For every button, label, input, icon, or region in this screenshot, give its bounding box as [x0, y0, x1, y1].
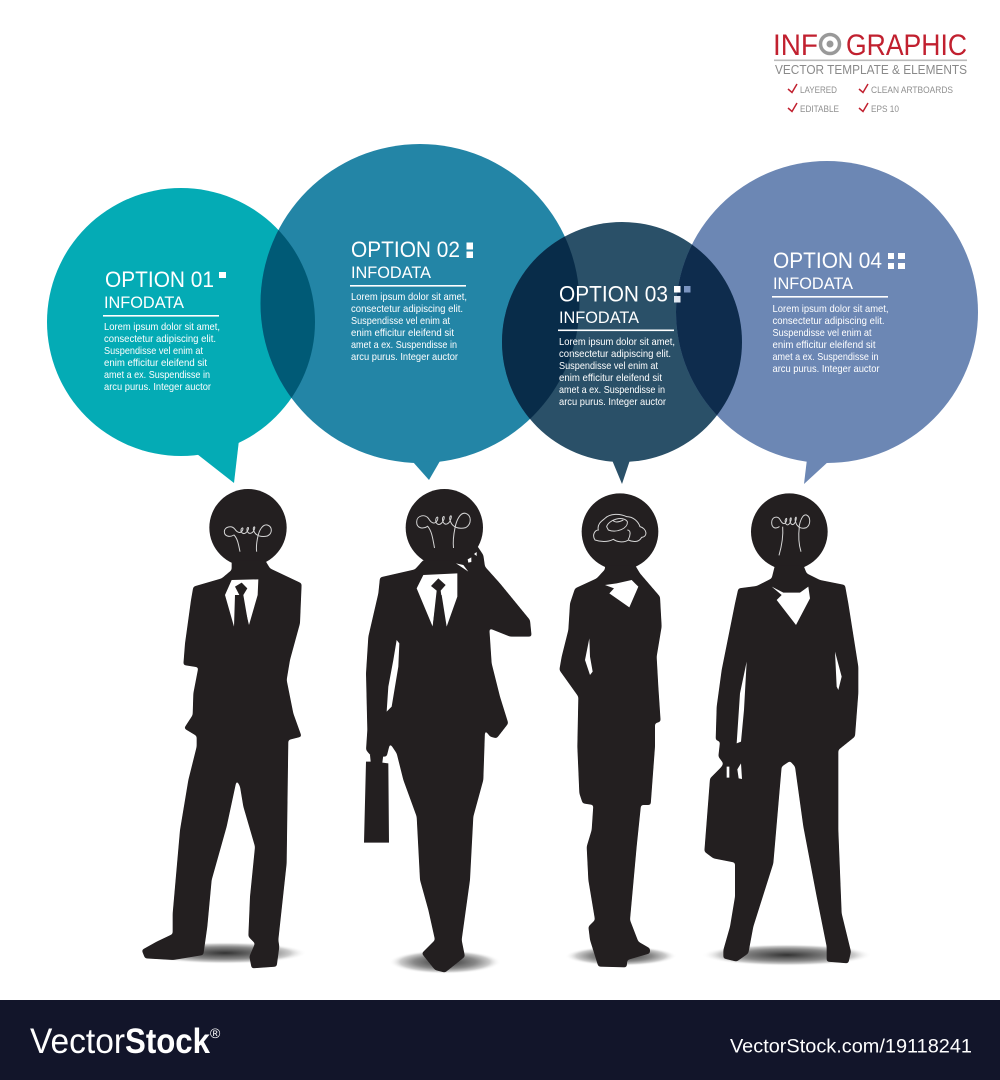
- option 02 text: INFODATA: [351, 263, 432, 282]
- feature checklist: CLEAN ARTBOARDS: [871, 85, 953, 95]
- icon: filament in head 2: [417, 513, 470, 548]
- bubble 1 shape: [47, 188, 315, 483]
- icon: filament in head 4: [772, 515, 810, 555]
- icon: briefcase 2: [364, 755, 389, 843]
- feature checklist: EDITABLE: [800, 104, 839, 114]
- ground shadow: figure 4: [702, 944, 872, 966]
- option 01 text: arcu purus. Integer auctor: [104, 381, 211, 393]
- overlap 1 and 2: [260, 230, 315, 398]
- ground shadow: figure 1: [143, 942, 307, 964]
- bubble 2 shape: [260, 144, 580, 480]
- option 04 text: INFODATA: [773, 274, 854, 293]
- icon: logo target ring: [820, 34, 840, 54]
- option 01 text: [103, 267, 226, 393]
- option 04 text: consectetur adipiscing elit.: [772, 315, 884, 327]
- option 02 text: amet a ex. Suspendisse in: [351, 339, 457, 351]
- option 04 text: amet a ex. Suspendisse in: [772, 351, 879, 363]
- option 04 text: arcu purus. Integer auctor: [772, 363, 880, 375]
- footer image id: VectorStock.com/19118241: [730, 1036, 972, 1058]
- option 01 text: OPTION 01: [105, 267, 214, 292]
- logo wordmark: [773, 29, 967, 62]
- option 03 text: consectetur adipiscing elit.: [559, 348, 671, 360]
- footer band: [0, 1000, 1000, 1080]
- option 04 text: Suspendisse vel enim at: [772, 327, 872, 339]
- option 01 text: INFODATA: [104, 293, 185, 312]
- option 04 text: enim efficitur eleifend sit: [772, 339, 876, 351]
- speech bubbles group: [47, 144, 978, 484]
- footer logo: [30, 1022, 221, 1061]
- option 02 text: Lorem ipsum dolor sit amet,: [351, 291, 467, 303]
- option 03 text: OPTION 03: [559, 282, 668, 306]
- option 03 text: arcu purus. Integer auctor: [559, 396, 666, 408]
- feature checklist: EPS 10: [871, 104, 899, 114]
- footer logo: ®: [210, 1025, 221, 1041]
- option 01 text: Suspendisse vel enim at: [104, 345, 203, 357]
- option 02 text: enim efficitur eleifend sit: [351, 327, 454, 339]
- overlap 3 and 4: [676, 244, 742, 416]
- option 03 text: amet a ex. Suspendisse in: [559, 384, 665, 396]
- ground shadow: figure 3: [565, 946, 677, 966]
- footer logo: Stock: [125, 1022, 210, 1061]
- option 02 text: Suspendisse vel enim at: [351, 315, 450, 327]
- figure 4: businesswoman in trouser suit with bag: [704, 493, 858, 963]
- icon: filament in head 1: [224, 525, 271, 552]
- option 01 text: consectetur adipiscing elit.: [104, 333, 216, 345]
- option 03 text: enim efficitur eleifend sit: [559, 372, 662, 384]
- bubble 3 shape: [502, 222, 742, 484]
- option 03 text: INFODATA: [559, 308, 640, 327]
- option 01 text: Lorem ipsum dolor sit amet,: [104, 321, 220, 333]
- overlap 2 and 3: [502, 236, 580, 419]
- option 04 text: [772, 248, 905, 375]
- option 04 text: OPTION 04: [773, 248, 882, 273]
- figure 1: businessman with arms folded: [142, 489, 302, 968]
- option 01 text: amet a ex. Suspendisse in: [104, 369, 210, 381]
- option 03 text: [558, 282, 690, 408]
- logo wordmark: INF: [773, 29, 818, 62]
- option 02 text: OPTION 02: [351, 237, 460, 262]
- option 04 text: Lorem ipsum dolor sit amet,: [772, 303, 888, 315]
- option 01 text: enim efficitur eleifend sit: [104, 357, 207, 369]
- feature checklist: [788, 84, 953, 114]
- option 03 text: Lorem ipsum dolor sit amet,: [559, 336, 675, 348]
- ground shadow: figure 2: [389, 950, 501, 974]
- feature checklist: LAYERED: [800, 85, 837, 95]
- figure 2: businessman on phone with briefcase: [364, 489, 532, 973]
- bubble 4 shape: [676, 161, 978, 484]
- option 03 text: Suspendisse vel enim at: [559, 360, 658, 372]
- footer logo: Vector: [30, 1022, 125, 1061]
- logo wordmark: GRAPHIC: [846, 29, 967, 62]
- figure 3: businesswoman: [559, 493, 662, 967]
- logo subtitle: VECTOR TEMPLATE & ELEMENTS: [775, 62, 967, 77]
- option 02 text: [350, 237, 473, 363]
- option 02 text: arcu purus. Integer auctor: [351, 351, 458, 363]
- icon: brain in head 3: [594, 514, 646, 542]
- option 02 text: consectetur adipiscing elit.: [351, 303, 463, 315]
- header logo: infographic vector template: [773, 29, 967, 114]
